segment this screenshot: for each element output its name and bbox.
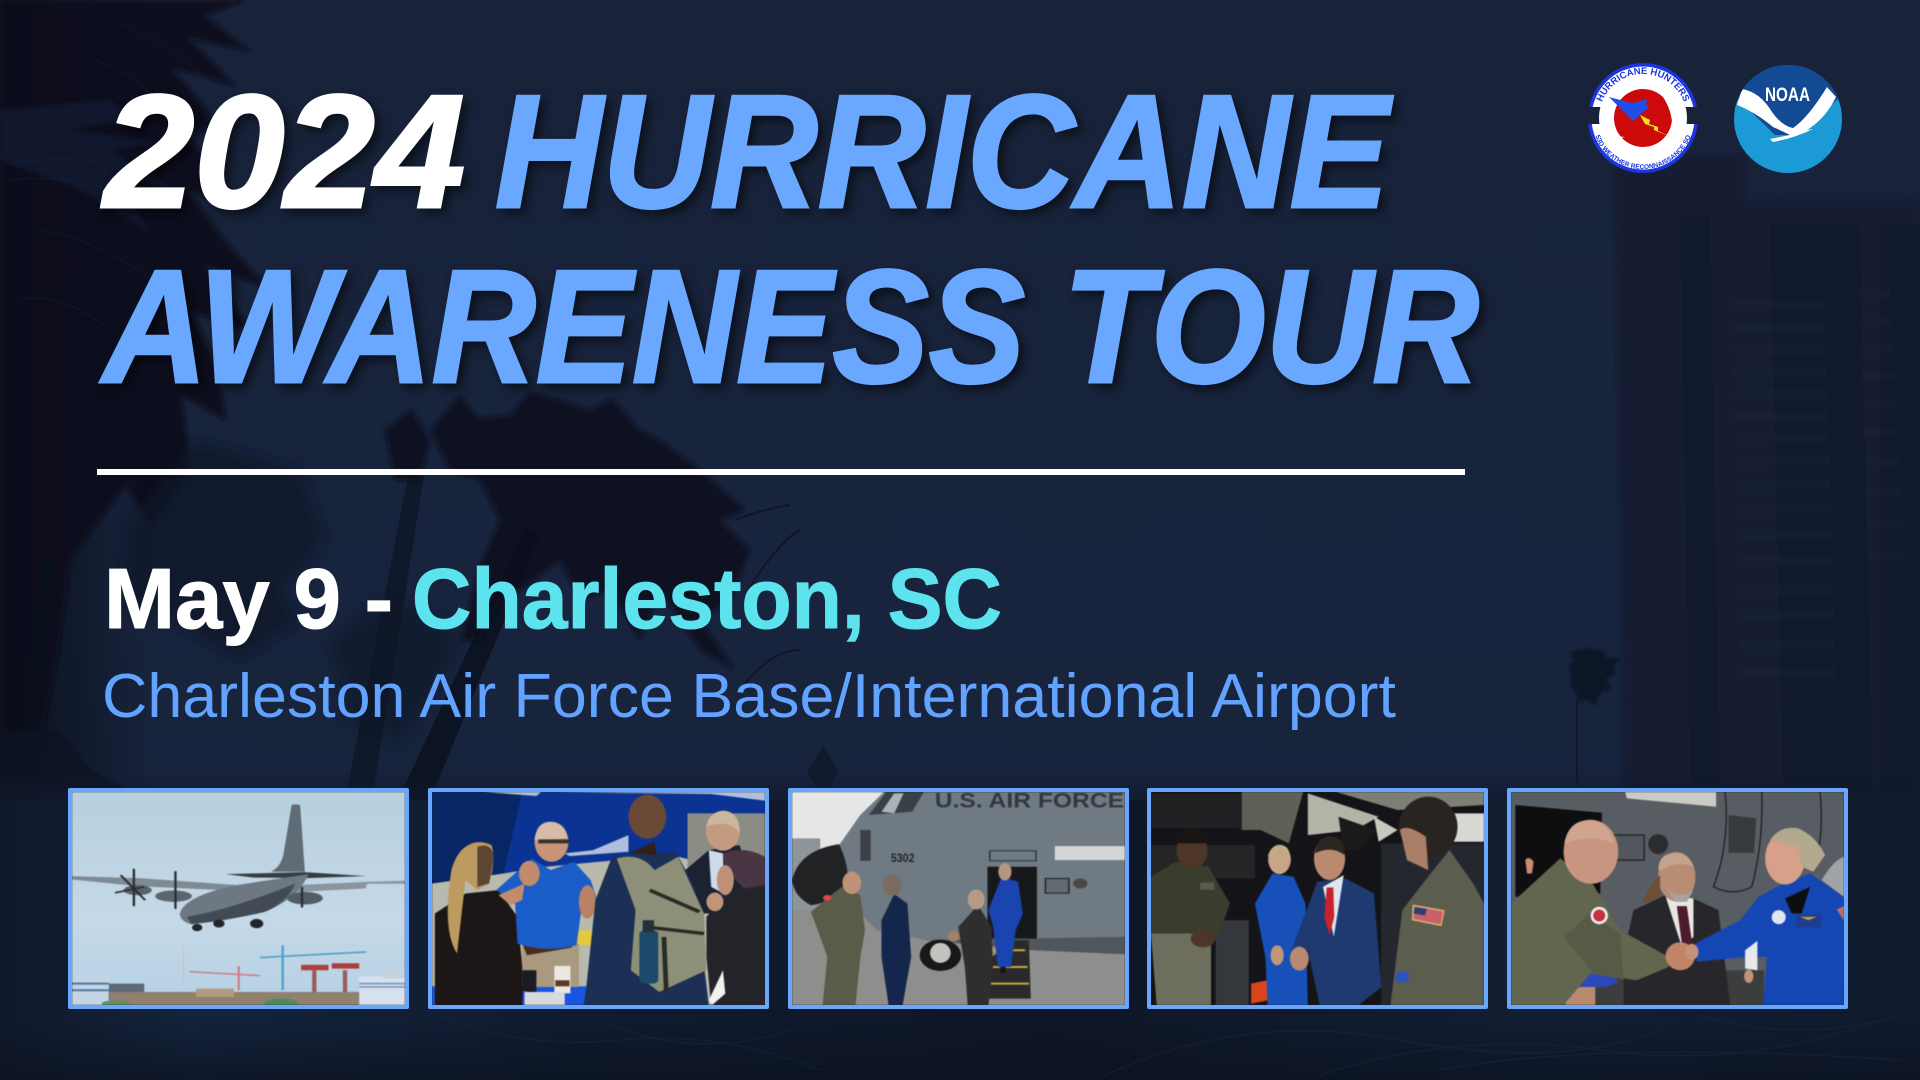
building silhouette <box>1615 153 1920 1010</box>
date and city: May 9 - <box>104 552 393 647</box>
logo: NOAA <box>1734 65 1842 173</box>
logo: NOAA: NOAA <box>1765 85 1810 106</box>
date and city <box>104 552 1002 647</box>
person: visitor with backpack <box>583 795 708 1005</box>
date and city: Charleston, SC <box>412 552 1002 647</box>
person: right man in jacket <box>685 811 753 914</box>
person: airman at right with flag patch <box>1390 797 1484 1005</box>
logo: Hurricane Hunters squadron badge: 53D WEATHER RECONNAISSANCE SQ <box>1596 134 1691 169</box>
boarding stairs <box>987 940 1030 999</box>
person: woman with ponytail <box>434 842 523 1005</box>
logo: Hurricane Hunters squadron badge: HURRICANE HUNTERS <box>1596 67 1690 102</box>
title: 2024 Hurricane Awareness Tour: 2024 <box>101 62 465 242</box>
person: woman in black jacket <box>706 850 764 1005</box>
photo: handshake in front of aircraft <box>1507 788 1848 1009</box>
person: airman at left <box>1151 831 1230 1005</box>
title: 2024 Hurricane Awareness Tour: TOUR <box>1063 237 1479 417</box>
small distant palm <box>1568 648 1620 785</box>
divider line <box>97 469 1465 475</box>
person: man in blue polo <box>496 822 597 1005</box>
storm water <box>0 770 1920 1080</box>
title: 2024 Hurricane Awareness Tour: HURRICANE <box>495 62 1393 242</box>
person: man in dark suit <box>1624 852 1730 1005</box>
photo: NOAA staff talking with visitors <box>428 788 768 1009</box>
person: man in navy suit <box>881 874 911 1005</box>
photo: C-130 aircraft in flight <box>68 788 409 1009</box>
person: woman in blue jumpsuit <box>988 863 1022 973</box>
palm tree silhouettes left <box>0 0 800 800</box>
photo: officials at the aircraft door <box>788 788 1128 1009</box>
photo: officials at the aircraft door: 5302 <box>890 852 914 865</box>
venue: Charleston Air Force Base/International Airport <box>102 662 1396 731</box>
title: 2024 Hurricane Awareness Tour <box>99 62 1479 417</box>
person: woman in blue flight suit <box>1685 828 1844 1005</box>
road sign silhouette <box>807 746 839 806</box>
title: 2024 Hurricane Awareness Tour: AWARENESS <box>99 237 1025 417</box>
person: crew member in flight suit <box>810 871 865 1005</box>
logo: Hurricane Hunters squadron badge <box>1588 63 1842 173</box>
person: man in navy suit and red tie <box>1290 836 1382 1005</box>
person: woman in blue flight suit <box>1255 845 1308 1005</box>
person: airman in flight suit <box>1511 820 1695 1005</box>
person: man in grey suit <box>947 889 993 1005</box>
photo: officials inside the aircraft <box>1147 788 1488 1009</box>
